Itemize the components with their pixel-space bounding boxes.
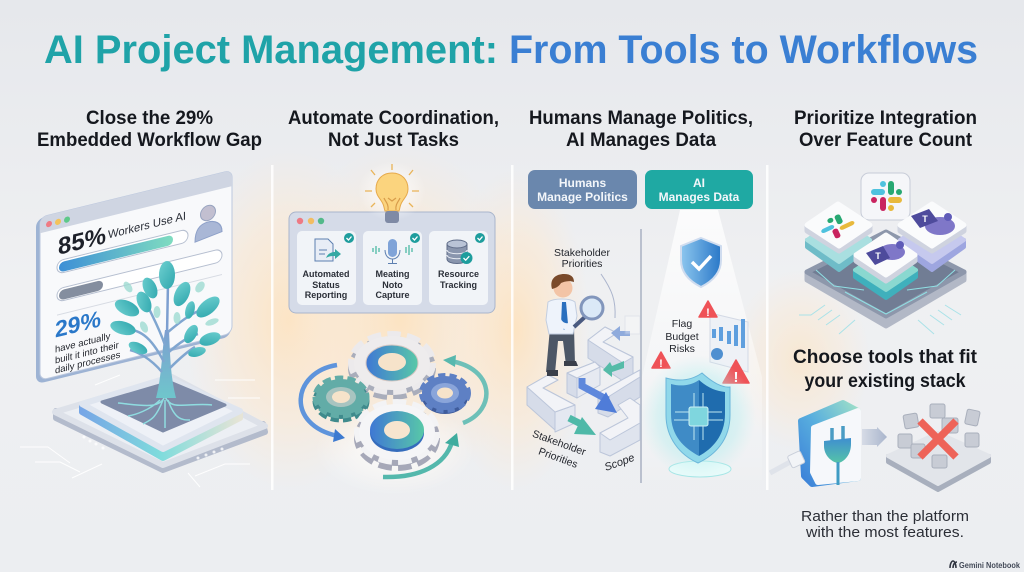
badge: humans manage politics: Manage Politics: [537, 190, 628, 204]
label: stakeholder priorities bottom: Stakeholder: [531, 428, 588, 459]
icon: warning triangles: [652, 301, 749, 386]
progress bar: 29 percent: [57, 249, 222, 302]
heading: humans and AI: AI Manages Data: [566, 130, 716, 151]
title: From Tools to Workflows: [509, 28, 978, 72]
base plate: [799, 232, 964, 334]
panel: automate coordination: [288, 108, 499, 477]
icon: warning triangles: !: [734, 369, 738, 386]
subheading: choose tools that fit: [793, 347, 978, 392]
panel: prioritize integration: [770, 108, 989, 541]
caption: have built it into processes: built it into their: [55, 340, 120, 367]
tile: right teams: T: [922, 214, 928, 224]
gear: left teal: [316, 379, 366, 419]
arrow: teal upper loop: [443, 355, 486, 423]
caption: rather than the platform: [801, 509, 969, 541]
icon: light bulb: [358, 161, 426, 223]
heading: close the gap: Close the 29%: [86, 108, 213, 129]
heading: prioritize integration: Prioritize Integration: [794, 108, 977, 129]
gear: bottom: [359, 404, 435, 466]
heading: prioritize integration: Over Feature Count: [799, 130, 973, 151]
badge: humans manage politics: [528, 170, 637, 209]
icon: person with magnifying glass: [546, 274, 603, 376]
badge: AI manages data: AI: [693, 176, 705, 190]
tile: center teams: [855, 235, 916, 298]
label: flag budget risks: [665, 318, 699, 355]
label: workers use AI: Workers Use AI: [108, 210, 186, 242]
card: automated status reporting: Automated: [302, 269, 350, 279]
icon: user avatar: [195, 202, 222, 242]
maze blocks: [527, 327, 640, 456]
progress bar: 85 percent: [57, 229, 188, 274]
title: [44, 28, 978, 72]
icon: tree growing from chip: [109, 261, 223, 398]
label: flag budget risks: Risks: [669, 343, 695, 355]
label: flag budget risks: Flag: [672, 318, 692, 330]
card: meeting note capture: [363, 231, 422, 305]
icon: interlocking gears: [301, 336, 486, 477]
label: flag budget risks: Budget: [665, 331, 699, 343]
icon: power plug module: [770, 403, 858, 485]
heading: humans and AI: [529, 108, 753, 151]
icon: chip platform: [20, 375, 265, 487]
tile: right teams: [900, 204, 964, 270]
tile: top slack: [861, 173, 910, 220]
card: automated status reporting: [297, 231, 356, 305]
icon: AI chip shield: [640, 355, 756, 479]
heading: automate coordination: [288, 108, 499, 151]
subheading: choose tools that fit: Choose tools that fit: [793, 347, 978, 368]
heading: close the gap: [37, 108, 262, 151]
tile: center teams: T: [875, 251, 881, 261]
arrow: to crossed platform: [862, 427, 887, 447]
chart: budget report: [710, 313, 748, 372]
badge: humans manage politics: Humans: [559, 176, 606, 190]
panel: browser window with statistics: [36, 170, 232, 384]
heading: automate coordination: Automate Coordination,: [288, 108, 499, 129]
panel: humans manage politics, AI manages data: [527, 108, 762, 483]
card: automated status reporting: Status: [312, 280, 340, 290]
badge: AI manages data: [645, 170, 753, 209]
title: AI Project Management:: [44, 28, 498, 72]
card: meeting note capture: Noto: [382, 280, 403, 290]
arrows through maze: [569, 316, 640, 435]
arrow: teal lower loop: [383, 433, 459, 477]
tile: left slack: [807, 204, 870, 270]
heading: close the gap: Embedded Workflow Gap: [37, 130, 262, 151]
badge: AI manages data: Manages Data: [659, 190, 740, 204]
label: stakeholder priorities top: Priorities: [562, 258, 602, 270]
subheading: choose tools that fit: your existing stack: [804, 371, 966, 392]
icon: integration stack: [799, 173, 964, 334]
stat: 29 percent: 29%: [55, 306, 101, 343]
card: meeting note capture: Meating: [375, 269, 410, 279]
label: stakeholder priorities bottom: Priorities: [537, 446, 579, 471]
label: scope: Scope: [603, 452, 636, 474]
caption: rather than the platform: with the most features.: [805, 525, 964, 541]
caption: have built it into processes: [55, 329, 121, 377]
heading: automate coordination: Not Just Tasks: [328, 130, 459, 151]
heading: humans and AI: Humans Manage Politics,: [529, 108, 753, 129]
card: meeting note capture: Capture: [375, 290, 410, 300]
icon: feature-heavy platform crossed out: [888, 404, 989, 490]
heading: prioritize integration: [794, 108, 977, 151]
label: stakeholder priorities top: Stakeholder: [554, 247, 611, 259]
card: resource tracking: Tracking: [440, 280, 477, 290]
caption: have built it into processes: have actually: [55, 331, 111, 356]
caption: have built it into processes: daily processes: [55, 350, 121, 377]
panel: close the workflow gap: [20, 108, 265, 487]
gear: top: [353, 336, 431, 395]
icon: shield with check: [681, 238, 721, 287]
icon: warning triangles: !: [706, 307, 710, 319]
panel: automation app window: [289, 212, 495, 313]
gear: right blue: [422, 376, 468, 414]
card: resource tracking: Resource: [438, 269, 479, 279]
card: automated status reporting: Reporting: [305, 290, 347, 300]
arrow: blue loop: [301, 365, 345, 442]
label: stakeholder priorities top: [554, 247, 611, 270]
stat: 85 percent: 85%: [58, 222, 106, 261]
card: resource tracking: [429, 231, 488, 305]
caption: rather than the platform: Rather than the platform: [801, 509, 969, 525]
icon: warning triangles: !: [659, 358, 663, 370]
